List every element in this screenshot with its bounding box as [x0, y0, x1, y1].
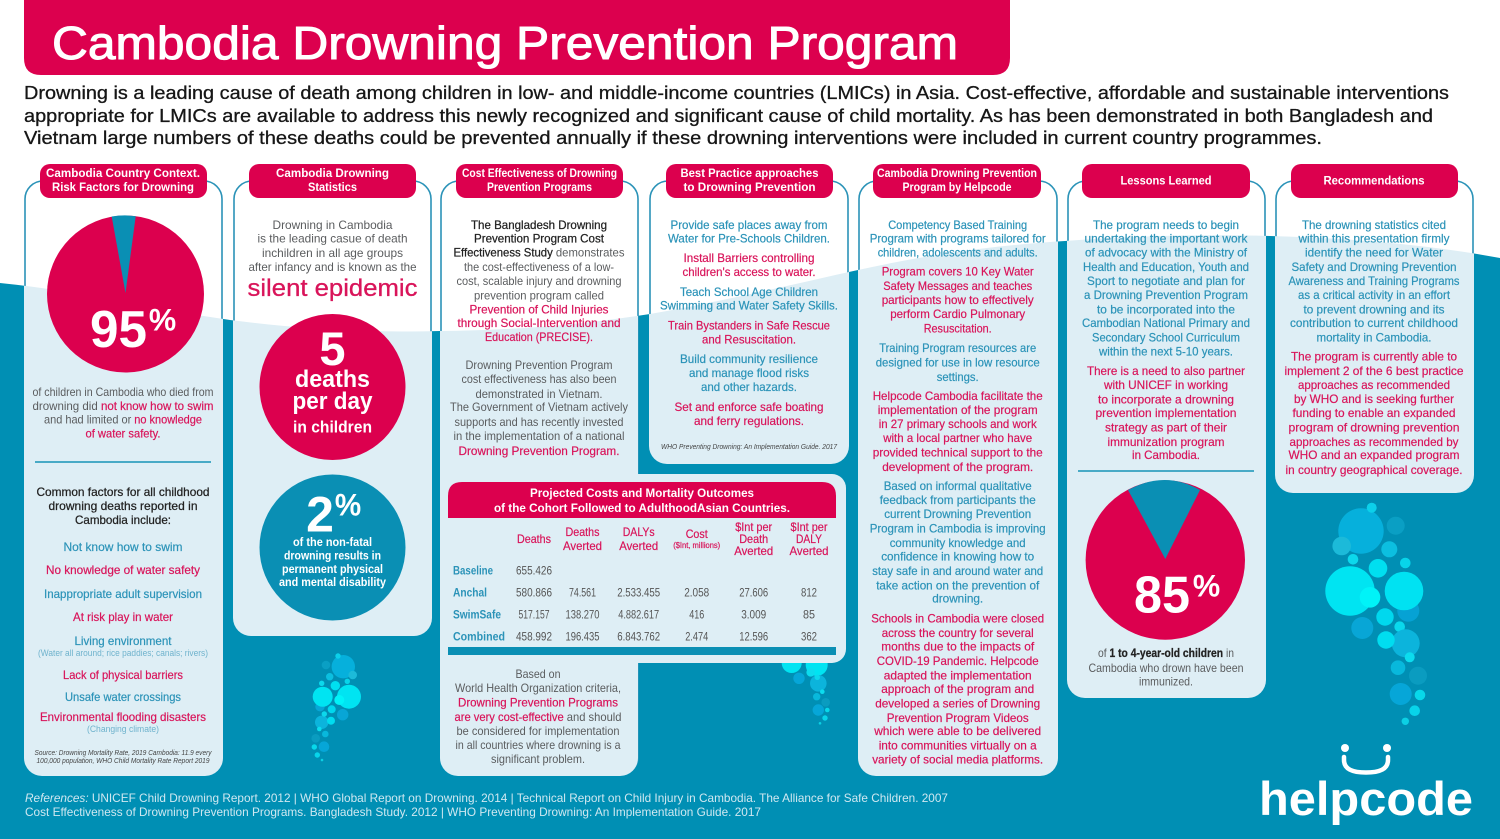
- text: WHO criteria: in all countries where drowning is a: [456, 738, 621, 752]
- text: need for water safety: [1288, 218, 1460, 344]
- table row: Combined: 6.843.762: [617, 632, 660, 644]
- text: UNICEF partnership: with UNICEF in working: [1103, 378, 1228, 392]
- callout: silent epidemic: silent epidemic: [248, 275, 418, 302]
- table row: Combined: 12.596: [739, 632, 768, 644]
- text: COVID adaptation: developed a series of Drowning: [875, 696, 1040, 710]
- pie chart: 85 percent: 85: [1134, 566, 1190, 624]
- pie chart: 85 percent: [1086, 480, 1245, 640]
- source note: [34, 748, 213, 765]
- text: COVID adaptation: approach of the program and: [881, 682, 1034, 696]
- text: WHO criteria: World Health Organization criteria,: [455, 681, 621, 695]
- text: expanded program: WHO and an expanded program: [1288, 448, 1460, 462]
- table column headers: $Int per: [735, 520, 772, 534]
- logo: helpcode: helpcode: [1259, 772, 1473, 825]
- text: need for water safety: as a critical activity in an effort: [1298, 288, 1451, 302]
- panel: lessons learned: [1067, 164, 1266, 698]
- intro paragraph: Vietnam large numbers of these deaths could be prevented annually if these drowning interventions were included in current country programmes.: [24, 127, 1322, 148]
- pie chart: 85 percent: %: [1193, 570, 1220, 603]
- text: advocacy: Secondary School Curriculum: [1092, 330, 1240, 344]
- table column headers: Averted: [734, 544, 773, 558]
- text: key messages: participants how to effectively: [882, 293, 1034, 307]
- icon: bubbles right: [1325, 503, 1427, 725]
- heading: country context: [40, 164, 207, 198]
- list: best practice approaches: [660, 218, 838, 428]
- text: implementation: development of the program.: [882, 460, 1033, 474]
- table row: SwimSafe: 416: [689, 610, 704, 622]
- table column headers: DALYs: [623, 525, 655, 539]
- text: feedback: Program in Cambodia is improving: [870, 522, 1046, 536]
- text: advocacy: [1082, 218, 1250, 358]
- list: risk factors: (Water all around; rice paddies; canals; rivers): [38, 648, 208, 658]
- text: training program: Competency Based Training: [888, 218, 1027, 232]
- table row: SwimSafe: 3.009: [741, 610, 766, 622]
- text: advocacy: within the next 5-10 years.: [1098, 344, 1233, 358]
- text: training program: Program with programs tailored for: [870, 232, 1046, 246]
- text: COVID adaptation: Prevention Program Videos: [887, 711, 1029, 725]
- text: leading cause of death: [248, 218, 417, 274]
- text: advocacy: The program needs to begin: [1093, 218, 1239, 232]
- title banner: [24, 0, 1010, 75]
- text: WHO criteria: Drowning Prevention Programs: [458, 696, 618, 710]
- text: WHO criteria: significant problem.: [491, 752, 585, 766]
- text: training resources: designed for use in low resource: [876, 356, 1040, 370]
- text: Bangladesh study: [454, 218, 624, 344]
- table row: SwimSafe: 85: [803, 610, 815, 622]
- text: 95 percent explanation: drowning did not know how to swim: [32, 399, 214, 413]
- stat circle: 5 deaths per day: [260, 314, 406, 460]
- table title: [448, 482, 836, 518]
- text: Vietnam program: demonstrated in Vietnam.: [476, 387, 602, 401]
- text: key messages: Safety Messages and teaches: [883, 279, 1032, 293]
- text: implementation: [873, 389, 1043, 474]
- text: 85 percent explanation: immunized.: [1139, 674, 1193, 688]
- table column headers: Deaths: [566, 525, 600, 539]
- table row: Anchal: Anchal: [453, 586, 487, 600]
- table row: SwimSafe: 138.270: [566, 610, 600, 622]
- table row: Combined: 458.992: [516, 632, 552, 644]
- text: COVID adaptation: which were able to be delivered: [873, 724, 1041, 738]
- text: need for water safety: mortality in Cambodia.: [1316, 330, 1432, 344]
- table row: Anchal: 74.561: [569, 588, 596, 600]
- text: need for water safety: Safety and Drowning Prevention: [1292, 260, 1456, 274]
- text: implementation: Helpcode Cambodia facilitate the: [873, 389, 1043, 403]
- icon: bubbles middle: [782, 653, 830, 725]
- text: 95 percent explanation: of children in Cambodia who died from: [32, 385, 214, 399]
- text: feedback: community knowledge and: [890, 536, 1026, 550]
- stat circle: 2 percent: 2: [306, 486, 334, 542]
- text: key messages: [882, 264, 1034, 336]
- list: risk factors: (Changing climate): [87, 724, 159, 734]
- text: expanded program: implement 2 of the 6 best practice: [1284, 364, 1464, 378]
- text: COVID adaptation: adapted the implementation: [884, 668, 1032, 682]
- text: Vietnam program: Drowning Prevention Program.: [458, 444, 620, 458]
- text: COVID adaptation: variety of social media platforms.: [872, 752, 1043, 766]
- table row: SwimSafe: [453, 608, 815, 622]
- list: risk factors: Environmental flooding disasters: [40, 710, 206, 724]
- text: 85 percent explanation: Cambodia who drown have been: [1088, 661, 1244, 675]
- stat circle: 2 percent: drowning results in: [284, 550, 381, 562]
- text: expanded program: in country geographical coverage.: [1286, 463, 1462, 477]
- heading: cost effectiveness: [456, 164, 623, 198]
- text: Bangladesh study: Effectiveness Study demonstrates: [454, 246, 624, 260]
- text: 85 percent explanation: [1088, 646, 1244, 688]
- text: leading cause of death: inchildren in all age groups: [262, 246, 403, 260]
- list: best practice approaches: and manage flood risks: [689, 366, 809, 380]
- text: 95 percent explanation: [32, 385, 214, 440]
- text: need for water safety: identify the need for Water: [1305, 246, 1443, 260]
- heading: recommendations: [1291, 164, 1458, 198]
- title banner: Cambodia Drowning Prevention Program: [52, 17, 958, 69]
- heading: lessons learned: Lessons Learned: [1120, 174, 1212, 188]
- text: need for water safety: contribution to current childhood: [1290, 316, 1458, 330]
- table column headers: [517, 520, 828, 558]
- table title: Projected Costs and Mortality Outcomes: [530, 486, 754, 500]
- table row: Baseline: Baseline: [453, 564, 493, 578]
- heading: lessons learned: [1082, 164, 1250, 198]
- text: training resources: [876, 341, 1040, 384]
- table row: Anchal: 2.533.455: [617, 588, 660, 600]
- text: need for water safety: within this presentation firmly: [1298, 232, 1450, 246]
- panel: Helpcode program: [858, 164, 1058, 776]
- panel: recommendations: [1275, 164, 1474, 493]
- text: advocacy: to be incorporated into the: [1097, 302, 1235, 316]
- intro paragraph: [24, 82, 1449, 148]
- text: need for water safety: Awareness and Training Programs: [1288, 274, 1460, 288]
- text: Bangladesh study: Prevention of Child Injuries: [470, 302, 608, 316]
- text: expanded program: funding to enable an expanded: [1292, 406, 1456, 420]
- text: leading cause of death: is the leading casue of death: [258, 232, 408, 246]
- panel: cost table: [441, 474, 846, 663]
- table row: Anchal: 27.606: [739, 588, 768, 600]
- list: best practice approaches: and other hazards.: [701, 380, 797, 394]
- stat circle: 2 percent: permanent physical: [282, 564, 383, 576]
- list: best practice approaches: Install Barriers controlling: [684, 251, 814, 265]
- text: leading cause of death: Drowning in Cambodia: [272, 218, 393, 232]
- icon: bubbles left: [311, 653, 361, 761]
- text: Vietnam program: supports and has recently invested: [454, 415, 624, 429]
- table column headers: Averted: [563, 539, 602, 553]
- table row: SwimSafe: SwimSafe: [453, 608, 501, 622]
- list: best practice approaches: Set and enforce safe boating: [674, 400, 824, 414]
- source note: WHO Preventing Drowning: An Implementation Guide. 2017: [661, 442, 838, 451]
- text: implementation: in 27 primary schools and work: [879, 417, 1038, 431]
- text: Bangladesh study: Education (PRECISE).: [485, 330, 593, 344]
- text: expanded program: [1284, 350, 1464, 477]
- text: feedback: current Drowning Prevention: [884, 507, 1031, 521]
- heading: best practice: Best Practice approaches: [680, 166, 819, 180]
- text: expanded program: by WHO and is seeking further: [1294, 392, 1454, 406]
- text: Vietnam program: Drowning Prevention Program: [466, 358, 612, 372]
- text: advocacy: a Drowning Prevention Program: [1084, 288, 1248, 302]
- text: advocacy: undertaking the important work: [1084, 232, 1248, 246]
- panel: best practice: [649, 164, 849, 464]
- list: risk factors: Inappropriate adult supervision: [44, 587, 202, 601]
- text: Vietnam program: [450, 358, 628, 458]
- text: training program: children, adolescents and adults.: [878, 246, 1038, 260]
- text: need for water safety: to prevent drowning and its: [1304, 302, 1444, 316]
- text: Bangladesh study: cost, scalable injury and drowning: [456, 274, 622, 288]
- table column headers: Averted: [790, 544, 828, 558]
- stat circle: 5 deaths per day: 5: [319, 322, 346, 375]
- table row: Anchal: 812: [801, 588, 817, 600]
- text: advocacy: Cambodian National Primary and: [1082, 316, 1250, 330]
- text: WHO criteria: Based on: [516, 667, 560, 681]
- text: UNICEF partnership: strategy as part of their: [1105, 420, 1227, 434]
- heading: drowning statistics: Statistics: [308, 180, 357, 194]
- heading: drowning statistics: Cambodia Drowning: [276, 166, 389, 180]
- list: best practice approaches: Teach School Age Children: [680, 285, 818, 299]
- text: WHO criteria: [454, 667, 622, 766]
- table row: Baseline: [453, 564, 552, 578]
- stat circle: 5 deaths per day: per day: [292, 388, 373, 415]
- text: Vietnam program: cost effectiveness has also been: [462, 372, 616, 386]
- stat circle: 2 percent: [260, 474, 406, 620]
- panel: cost effectiveness: [440, 164, 638, 776]
- text: advocacy: of advocacy with the Ministry of: [1085, 246, 1248, 260]
- text: leading cause of death: after infancy and is known as the: [248, 260, 417, 274]
- heading: Helpcode program: [873, 164, 1041, 198]
- table row: Combined: 2.474: [685, 632, 709, 644]
- list: best practice approaches: Train Bystanders in Safe Rescue: [668, 318, 830, 332]
- list: risk factors: At risk play in water: [73, 610, 173, 624]
- text: expanded program: approaches as recommended: [1298, 378, 1450, 392]
- references: Cost Effectiveness of Drowning Prevention Programs. Bangladesh Study. 2012 | WHO Preventing Drowning: An Implementation Guide. 2017: [25, 805, 761, 819]
- heading: country context: Risk Factors for Drowning: [52, 180, 194, 194]
- references: [25, 791, 948, 819]
- table row: SwimSafe: 4.882.617: [618, 610, 659, 622]
- text: need for water safety: The drowning statistics cited: [1302, 218, 1446, 232]
- text: expanded program: approaches as recommended by: [1290, 435, 1458, 449]
- text: WHO criteria: are very cost-effective and should: [454, 710, 622, 724]
- list: risk factors: Lack of physical barriers: [63, 668, 183, 682]
- text: UNICEF partnership: immunization program: [1108, 435, 1224, 449]
- stat circle: 5 deaths per day: in children: [293, 418, 372, 436]
- stat circle: 2 percent: and mental disability: [279, 577, 387, 589]
- text: COVID adaptation: COVID-19 Pandemic. Helpcode: [877, 654, 1039, 668]
- heading: cost effectiveness: Prevention Programs: [487, 180, 592, 194]
- stat circle: 5 deaths per day: deaths: [295, 366, 370, 393]
- table column headers: $Int per: [790, 520, 828, 534]
- text: Bangladesh study: prevention program called: [474, 288, 604, 302]
- panel: country context: [24, 164, 223, 776]
- text: COVID adaptation: across the country for several: [882, 626, 1034, 640]
- text: Bangladesh study: Prevention Program Cost: [474, 232, 605, 246]
- heading: best practice: to Drowning Prevention: [684, 180, 816, 194]
- text: 95 percent explanation: of water safety.: [86, 426, 160, 440]
- text: common factors heading: Cambodia include:: [75, 513, 171, 527]
- list: best practice approaches: Provide safe places away from: [670, 218, 828, 232]
- list: risk factors: Living environment: [74, 634, 172, 648]
- intro paragraph: appropriate for LMICs are available to address this newly recognized and significant cause of child mortality. As has been demonstrated in both Bangladesh and: [24, 105, 1433, 126]
- table row: Anchal: [453, 586, 817, 600]
- text: Vietnam program: The Government of Vietnam actively: [450, 400, 628, 414]
- text: common factors heading: drowning deaths reported in: [48, 499, 198, 513]
- table column headers: ($Int, millions): [673, 541, 721, 550]
- text: expanded program: The program is currently able to: [1291, 350, 1457, 364]
- heading: best practice: [666, 164, 833, 198]
- table row: Combined: 362: [801, 632, 817, 644]
- list: best practice approaches: children's access to water.: [682, 265, 816, 279]
- list: risk factors: [38, 540, 208, 734]
- text: 85 percent explanation: of 1 to 4-year-old children in: [1098, 646, 1234, 660]
- list: risk factors: Unsafe water crossings: [65, 690, 181, 704]
- table row: Anchal: 580.866: [516, 588, 552, 600]
- logo: helpcode: [1259, 744, 1473, 825]
- text: implementation: implementation of the program: [878, 403, 1038, 417]
- text: Vietnam program: in the implementation of a national: [454, 429, 624, 443]
- table title: of the Cohort Followed to AdulthoodAsian Countries.: [494, 501, 790, 515]
- table row: Combined: 196.435: [566, 632, 600, 644]
- table column headers: Death: [739, 532, 768, 546]
- text: advocacy: Sport to negotiate and plan for: [1087, 274, 1245, 288]
- text: feedback: feedback from participants the: [880, 493, 1036, 507]
- table row: Combined: Combined: [453, 630, 505, 644]
- stat circle: 2 percent: of the non-fatal: [293, 537, 372, 549]
- table row: Anchal: 2.058: [684, 588, 709, 600]
- table row: Combined: [453, 630, 817, 644]
- list: best practice approaches: Build community resilience: [680, 352, 818, 366]
- text: UNICEF partnership: prevention implementation: [1096, 406, 1236, 420]
- text: feedback: stay safe in and around water and: [872, 564, 1043, 578]
- text: Bangladesh study: The Bangladesh Drowning: [471, 218, 607, 232]
- text: feedback: Based on informal qualitative: [884, 479, 1032, 493]
- table column headers: Deaths: [517, 532, 551, 546]
- source note: 100,000 population, WHO Child Mortality Rate Report 2019: [36, 756, 210, 765]
- text: COVID adaptation: into communities virtually on a: [879, 738, 1037, 752]
- source note: Source: Drowning Mortality Rate, 2019 Cambodia: 11.9 every: [34, 748, 213, 757]
- panel: drowning statistics: [233, 164, 432, 636]
- text: training resources: Training Program resources are: [879, 341, 1036, 355]
- list: best practice approaches: and Resuscitation.: [702, 332, 796, 346]
- text: COVID adaptation: months due to the impacts of: [881, 640, 1035, 654]
- intro paragraph: Drowning is a leading cause of death among children in low- and middle-income countries (LMICs) in Asia. Cost-effective, affordable and sustainable interventions: [24, 82, 1449, 103]
- text: feedback: confidence in knowing how to: [881, 550, 1035, 564]
- pie chart: 95 percent: [47, 215, 204, 372]
- list: risk factors: Not know how to swim: [64, 540, 183, 554]
- text: key messages: Resuscitation.: [924, 322, 992, 336]
- text: Bangladesh study: through Social-Intervention and: [458, 316, 620, 330]
- stat circle: 2 percent: %: [335, 489, 361, 522]
- text: COVID adaptation: [871, 612, 1044, 766]
- text: feedback: take action on the prevention of: [876, 578, 1040, 592]
- text: training resources: settings.: [937, 370, 979, 384]
- text: UNICEF partnership: in Cambodia.: [1132, 448, 1200, 462]
- table row: SwimSafe: 517.157: [518, 610, 550, 622]
- table row: Baseline: 655.426: [516, 566, 552, 578]
- text: expanded program: program of drowning prevention: [1288, 420, 1460, 434]
- text: Bangladesh study: the cost-effectiveness of a low-: [464, 260, 614, 274]
- list: best practice approaches: and ferry regulations.: [694, 414, 804, 428]
- text: COVID adaptation: Schools in Cambodia were closed: [871, 612, 1044, 626]
- background wave: [0, 235, 1500, 839]
- text: key messages: perform Cardio Pulmonary: [890, 307, 1025, 321]
- text: feedback: [870, 479, 1046, 606]
- text: common factors heading: [36, 485, 210, 527]
- text: common factors heading: Common factors for all childhood: [36, 485, 210, 499]
- text: UNICEF partnership: There is a need to also partner: [1087, 364, 1245, 378]
- heading: Helpcode program: Cambodia Drowning Prevention: [877, 166, 1037, 180]
- text: key messages: Program covers 10 Key Water: [882, 264, 1034, 278]
- text: UNICEF partnership: to incorporate a drowning: [1098, 392, 1234, 406]
- table column headers: Cost: [686, 527, 708, 541]
- pie chart: 95 percent: %: [149, 304, 176, 337]
- table column headers: Averted: [619, 539, 658, 553]
- text: implementation: provided technical support to the: [873, 446, 1043, 460]
- text: 95 percent explanation: and had limited or no knowledge: [44, 412, 202, 426]
- text: feedback: drowning.: [932, 592, 983, 606]
- text: UNICEF partnership: [1087, 364, 1245, 462]
- pie chart: 95 percent: 95: [90, 301, 147, 359]
- list: best practice approaches: Water for Pre-Schools Children.: [668, 232, 830, 246]
- text: advocacy: Health and Education, Youth and: [1083, 260, 1249, 274]
- table column headers: DALY: [796, 532, 822, 546]
- references: References: UNICEF Child Drowning Report. 2012 | WHO Global Report on Drowning. 2014 | Technical Report on Child Injury in Cambodia. The Alliance for Safe Children. 2007: [25, 791, 948, 805]
- list: risk factors: No knowledge of water safety: [46, 563, 200, 577]
- heading: country context: Cambodia Country Context.: [46, 166, 200, 180]
- text: WHO criteria: be considered for implementation: [456, 724, 620, 738]
- heading: Helpcode program: Program by Helpcode: [902, 180, 1012, 194]
- text: implementation: with a local partner who have: [882, 431, 1033, 445]
- heading: cost effectiveness: Cost Effectiveness of Drowning: [462, 166, 617, 180]
- heading: drowning statistics: [249, 164, 416, 198]
- text: training program: [870, 218, 1046, 260]
- list: best practice approaches: Swimming and Water Safety Skills.: [660, 298, 838, 312]
- heading: recommendations: Recommendations: [1324, 174, 1425, 188]
